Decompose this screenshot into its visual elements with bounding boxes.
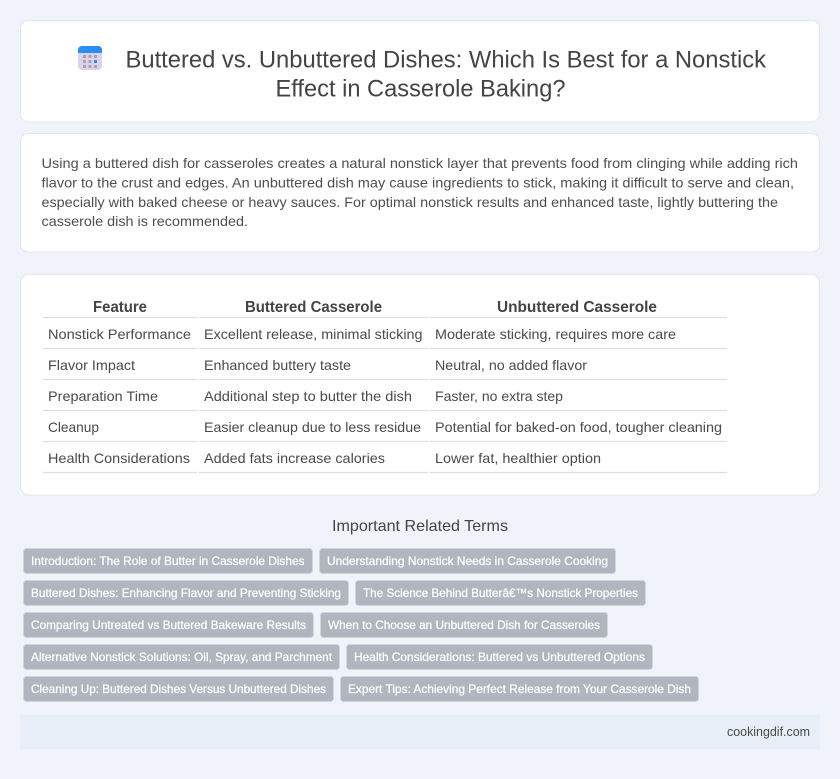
tag bbox=[356, 580, 646, 606]
tag bbox=[24, 644, 340, 670]
summary paragraph: especially with baked cheese or heavy sauces. For optimal nonstick results and enhanced taste, lightly buttering the bbox=[42, 194, 778, 210]
row: cleanup: Potential for baked-on food, tougher cleaning bbox=[435, 419, 722, 435]
tag bbox=[320, 548, 616, 574]
title: Buttered vs. Unbuttered Dishes: Which Is Best for a Nonstick bbox=[126, 46, 767, 74]
row: preparation time bbox=[48, 388, 563, 404]
table header: Buttered Casserole bbox=[245, 299, 382, 316]
footer: cookingdif.com bbox=[727, 725, 810, 739]
row: cleanup bbox=[48, 419, 722, 435]
row: flavor impact: Enhanced buttery taste bbox=[204, 357, 351, 373]
row: health considerations: Health Considerations bbox=[48, 450, 190, 466]
row: preparation time: Faster, no extra step bbox=[435, 388, 563, 404]
row: nonstick performance bbox=[48, 326, 676, 342]
table header bbox=[93, 299, 657, 316]
summary paragraph: casserole dish is recommended. bbox=[42, 213, 248, 229]
tag: Buttered Dishes: Enhancing Flavor and Preventing Sticking bbox=[31, 586, 341, 600]
tag: Alternative Nonstick Solutions: Oil, Spray, and Parchment bbox=[31, 650, 333, 664]
tag bbox=[24, 580, 348, 606]
row: preparation time: Preparation Time bbox=[48, 388, 158, 404]
tag bbox=[346, 644, 652, 670]
row: cleanup: Cleanup bbox=[48, 419, 99, 435]
row: health considerations bbox=[48, 450, 601, 466]
row: preparation time: Additional step to butter the dish bbox=[204, 388, 412, 404]
panel: summary text bbox=[20, 134, 820, 252]
tag bbox=[320, 612, 608, 638]
panel: header bbox=[20, 20, 820, 122]
icon: calendar bbox=[78, 46, 102, 70]
tag bbox=[340, 676, 698, 702]
row: nonstick performance: Excellent release, minimal sticking bbox=[204, 326, 422, 342]
tag bbox=[24, 548, 312, 574]
tag bbox=[24, 612, 314, 638]
tag: Introduction: The Role of Butter in Casserole Dishes bbox=[31, 554, 304, 568]
tag: Comparing Untreated vs Buttered Bakeware Results bbox=[31, 618, 306, 632]
row: flavor impact: Neutral, no added flavor bbox=[435, 357, 587, 373]
related term tags bbox=[24, 548, 698, 702]
footer bbox=[20, 715, 820, 749]
summary paragraph: Using a buttered dish for casseroles creates a natural nonstick layer that prevents food from clinging while adding rich bbox=[42, 155, 798, 171]
row: flavor impact: Flavor Impact bbox=[48, 357, 135, 373]
row: cleanup: Easier cleanup due to less residue bbox=[204, 419, 421, 435]
tag: Understanding Nonstick Needs in Casserole Cooking bbox=[327, 554, 608, 568]
tag: The Science Behind Butterâ€™s Nonstick Properties bbox=[363, 586, 638, 600]
row: nonstick performance: Nonstick Performance bbox=[48, 326, 191, 342]
row: nonstick performance: Moderate sticking, requires more care bbox=[435, 326, 676, 342]
tag: Expert Tips: Achieving Perfect Release from Your Casserole Dish bbox=[348, 682, 691, 696]
heading: related terms: Important Related Terms bbox=[332, 518, 508, 535]
row: flavor impact bbox=[48, 357, 587, 373]
table header: Feature bbox=[93, 299, 147, 316]
panel: comparison table bbox=[20, 274, 820, 495]
tag: When to Choose an Unbuttered Dish for Casseroles bbox=[328, 618, 600, 632]
row: health considerations: Lower fat, healthier option bbox=[435, 450, 601, 466]
row: health considerations: Added fats increase calories bbox=[204, 450, 385, 466]
tag bbox=[24, 676, 334, 702]
tag: Cleaning Up: Buttered Dishes Versus Unbuttered Dishes bbox=[31, 682, 326, 696]
title: Effect in Casserole Baking? bbox=[276, 76, 566, 102]
summary paragraph: flavor to the crust and edges. An unbuttered dish may cause ingredients to stick, making it difficult to serve and clean, bbox=[42, 174, 794, 190]
tag: Health Considerations: Buttered vs Unbuttered Options bbox=[354, 650, 645, 664]
table header: Unbuttered Casserole bbox=[497, 299, 657, 316]
